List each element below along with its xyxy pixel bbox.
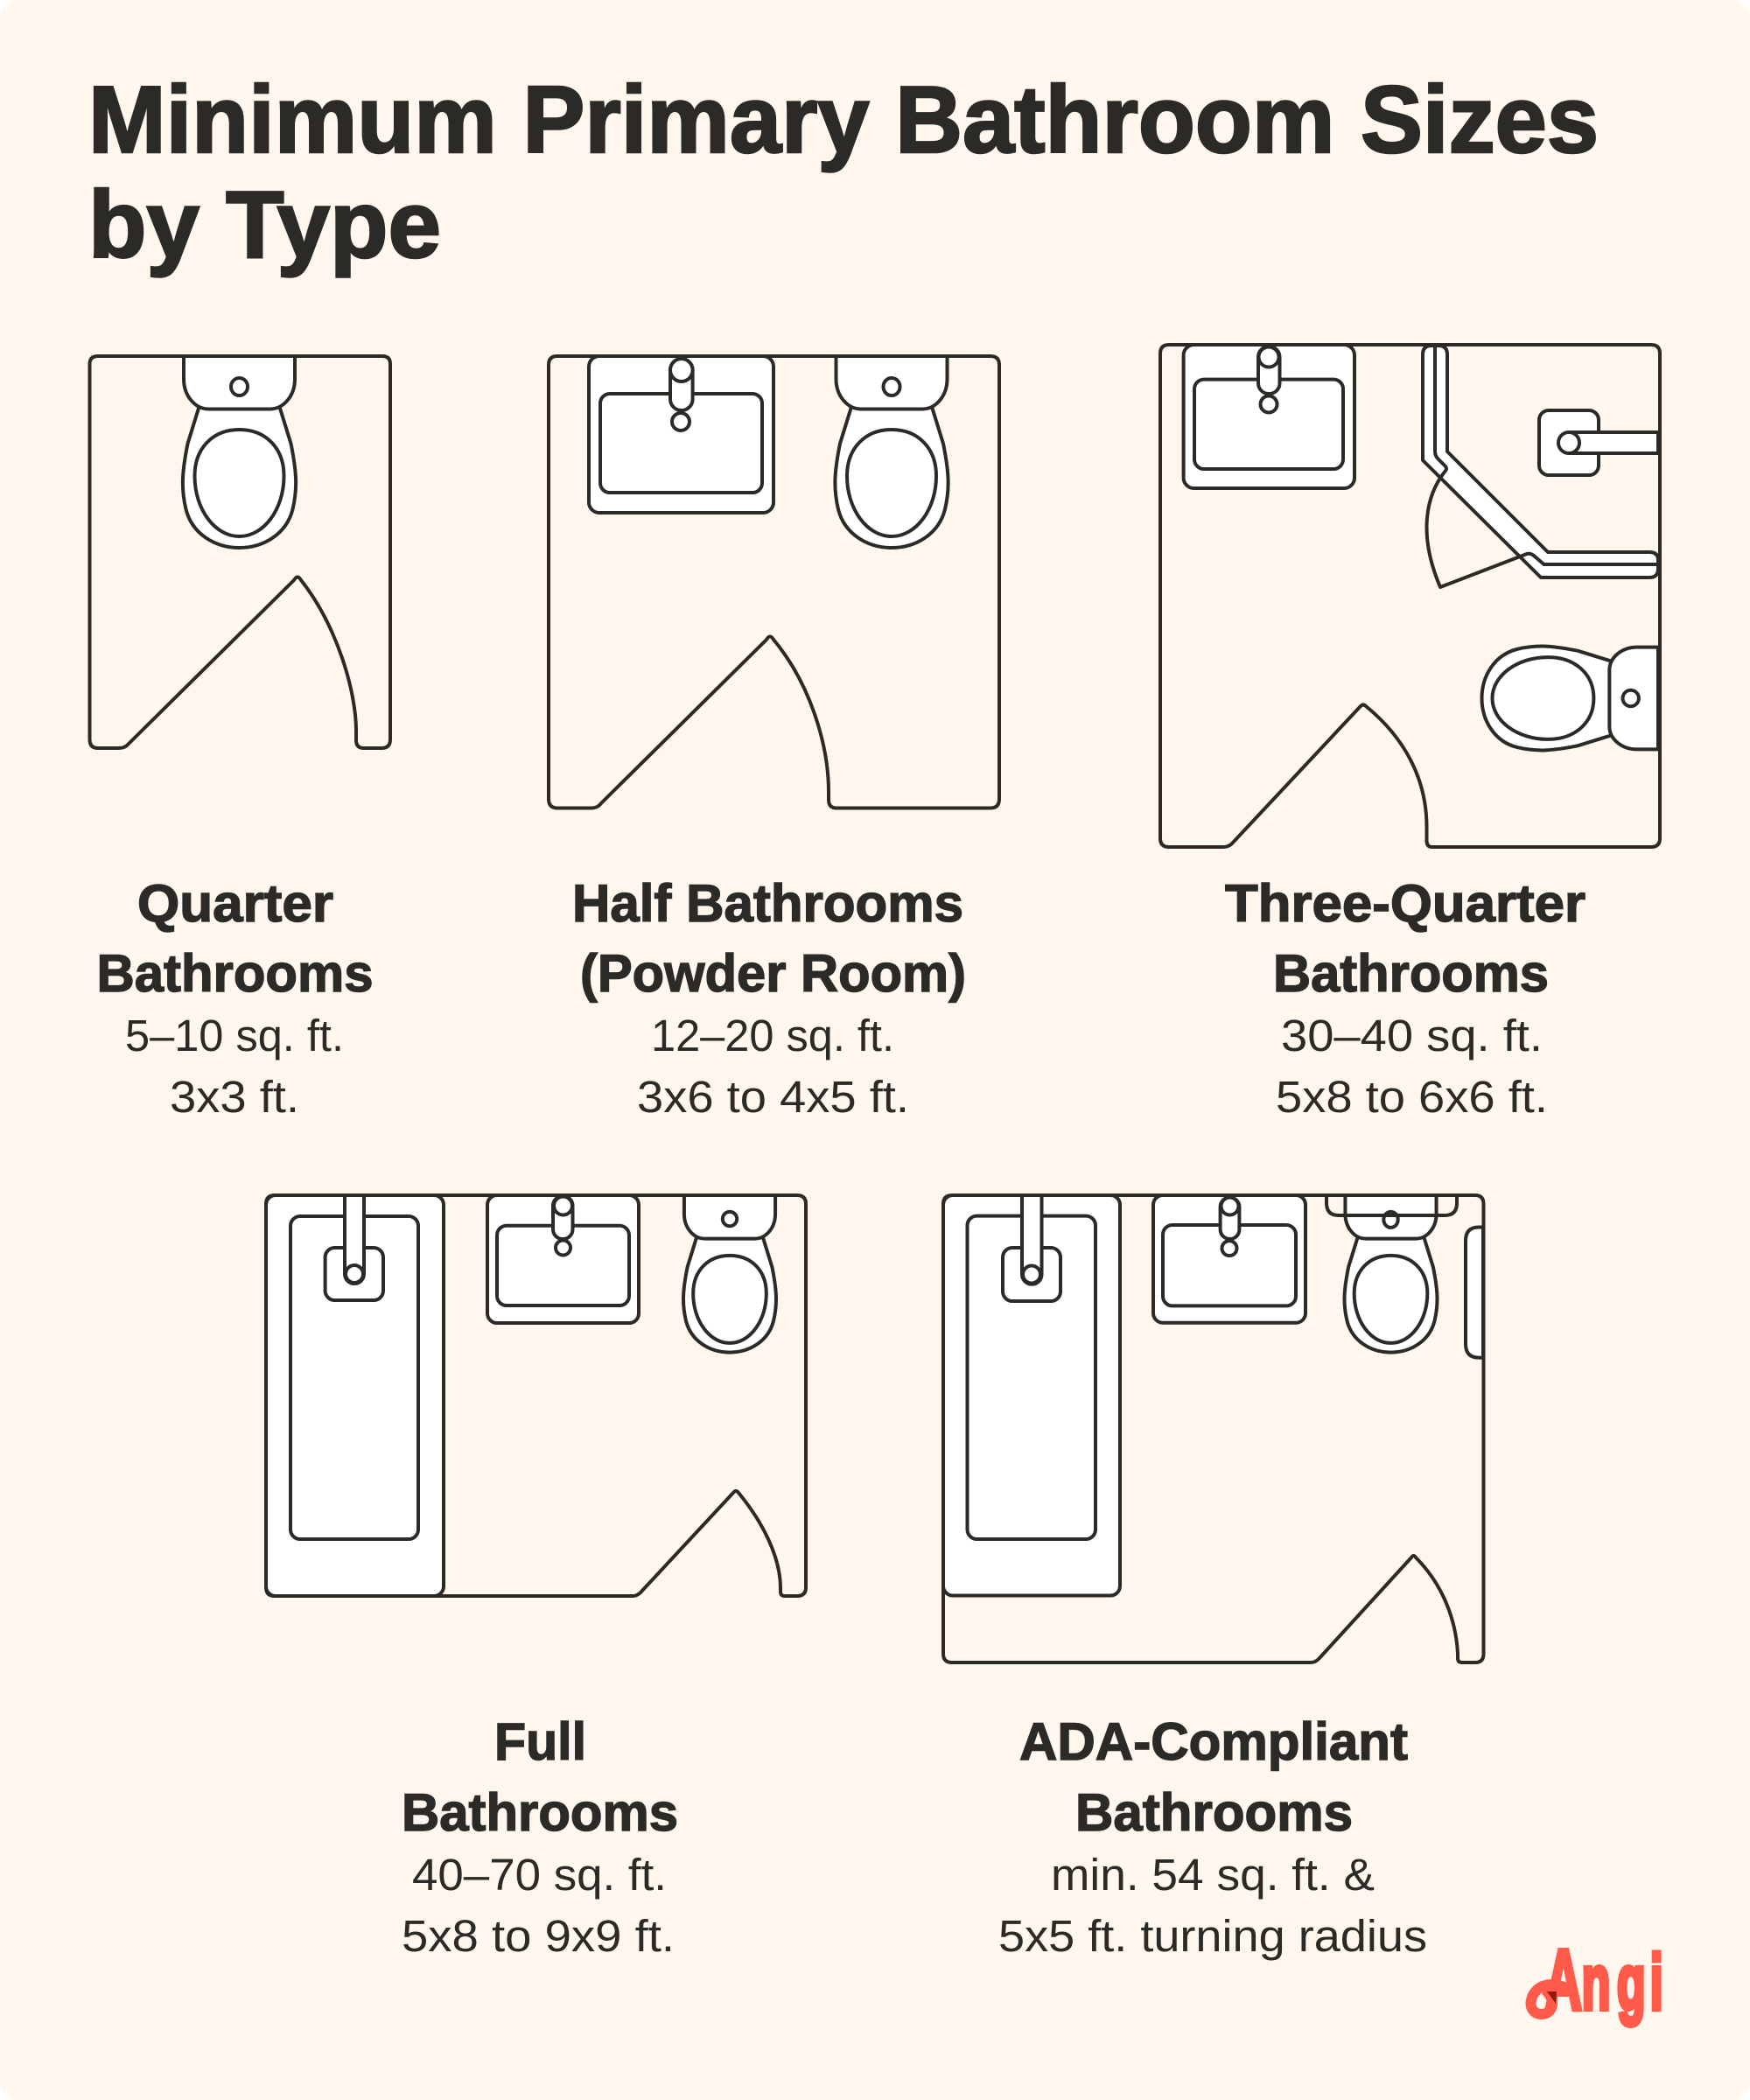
icon: toilet [183, 356, 296, 548]
icon: sink [1184, 345, 1354, 488]
label: quarter bathrooms: Quarter [137, 874, 333, 933]
label: three-quarter bathrooms: 5x8 to 6x6 ft. [1276, 1072, 1548, 1122]
label: ada-compliant bathrooms: ADA-Compliant [1019, 1712, 1408, 1771]
icon: sink [487, 1195, 639, 1323]
label: quarter bathrooms: Bathrooms [96, 944, 373, 1003]
panel: half bathrooms [549, 356, 999, 1122]
icon: toilet [835, 356, 948, 548]
label: three-quarter bathrooms: 30–40 sq. ft. [1281, 1011, 1543, 1060]
label: full bathrooms: Bathrooms [402, 1783, 678, 1842]
logo: Angi: n [1582, 1939, 1610, 2026]
label: half bathrooms: 12–20 sq. ft. [651, 1011, 894, 1060]
logo: Angi: g [1617, 1939, 1646, 2026]
icon: side grab bar [1466, 1227, 1483, 1358]
floor plan: quarter bathroom [89, 356, 390, 748]
icon: sink [589, 356, 774, 513]
floor plan: three-quarter bathroom [1160, 345, 1660, 847]
label: half bathrooms: (Powder Room) [580, 944, 966, 1003]
label: three-quarter bathrooms [1225, 874, 1586, 1122]
label: three-quarter bathrooms: Bathrooms [1273, 944, 1549, 1003]
logo: Angi [1531, 1933, 1663, 2027]
panel: ada-compliant bathrooms [943, 1195, 1484, 1961]
label: ada-compliant bathrooms: 5x5 ft. turning radius [998, 1911, 1427, 1961]
title: by Type [88, 172, 441, 278]
label: quarter bathrooms: 3x3 ft. [170, 1072, 299, 1122]
label: half bathrooms: 3x6 to 4x5 ft. [637, 1072, 909, 1122]
label: ada-compliant bathrooms [998, 1712, 1427, 1961]
floor plan: full bathroom [266, 1195, 806, 1596]
icon: toilet [1345, 1195, 1437, 1353]
floor plan: half bathroom [549, 356, 999, 808]
label: full bathrooms: 40–70 sq. ft. [412, 1850, 667, 1900]
title: Minimum Primary Bathroom Sizes [88, 66, 1599, 173]
panel: quarter bathrooms [89, 356, 390, 1122]
icon: shower enclosure [1423, 346, 1658, 587]
icon: rear grab bar [1326, 1198, 1457, 1215]
panel: full bathrooms [266, 1195, 806, 1961]
icon: bathtub [943, 1195, 1120, 1596]
icon: bathtub [266, 1195, 444, 1596]
label: full bathrooms: 5x8 to 9x9 ft. [402, 1911, 675, 1961]
floor plan: ada-compliant bathroom [943, 1195, 1484, 1662]
label: half bathrooms: Half Bathrooms [572, 874, 963, 933]
panel: three-quarter bathrooms [1160, 345, 1660, 1122]
logo: Angi: i [1650, 1939, 1663, 2026]
title [88, 66, 1599, 278]
label: half bathrooms [572, 874, 966, 1122]
logo: Angi: A [1545, 1933, 1582, 2027]
label: ada-compliant bathrooms: Bathrooms [1075, 1783, 1353, 1842]
icon: towel bar [1539, 410, 1658, 475]
icon: toilet [683, 1195, 776, 1353]
label: quarter bathrooms: 5–10 sq. ft. [125, 1011, 344, 1060]
icon: sink [1153, 1195, 1306, 1323]
icon: toilet [1482, 647, 1658, 750]
label: ada-compliant bathrooms: min. 54 sq. ft. & [1051, 1850, 1375, 1900]
label: full bathrooms [402, 1712, 678, 1961]
label: three-quarter bathrooms: Three-Quarter [1225, 874, 1586, 933]
label: quarter bathrooms [96, 874, 373, 1122]
label: full bathrooms: Full [494, 1712, 586, 1771]
